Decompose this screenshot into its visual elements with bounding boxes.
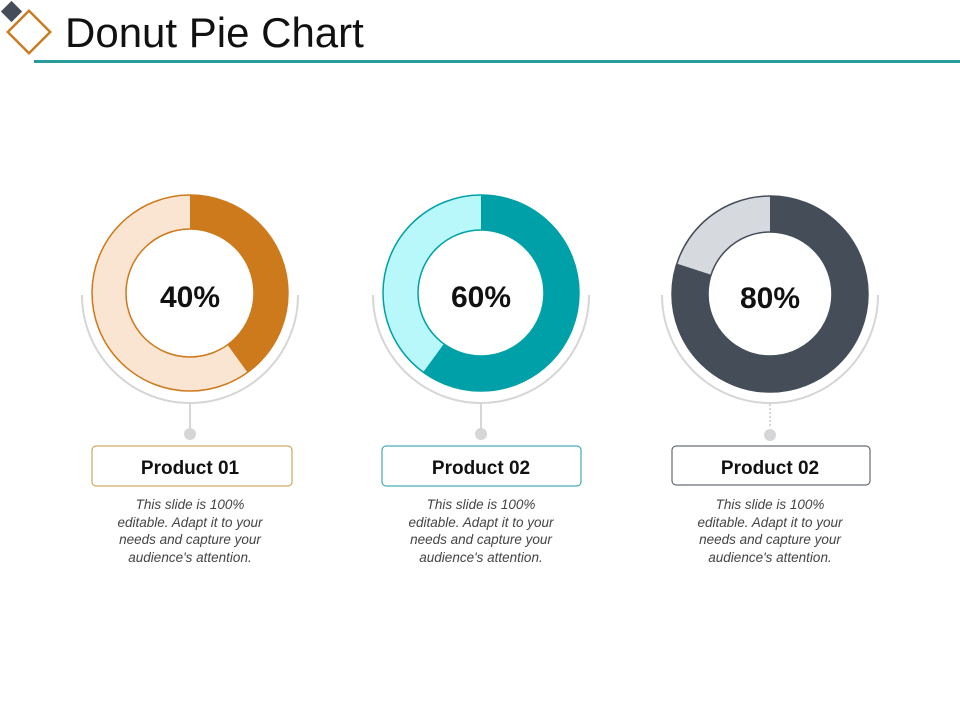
title underline [34,60,960,63]
description: audience's attention. [128,550,252,565]
header icon: diamonds [1,1,50,53]
description: audience's attention. [419,550,543,565]
connector [764,404,776,441]
description: This slide is 100% [716,497,824,512]
panel: product 02 (third) [662,196,878,565]
value label: 40% [160,281,220,314]
description: This slide is 100% [136,497,244,512]
description: audience's attention. [708,550,832,565]
description: editable. Adapt it to your [697,515,843,530]
value label: 80% [740,282,800,315]
product box [382,446,581,486]
panel: product 02 [373,195,589,565]
description: needs and capture your [699,532,841,547]
half ring [662,295,878,403]
half ring [373,295,589,403]
donut 60% [383,195,579,391]
description: editable. Adapt it to your [117,515,263,530]
description: needs and capture your [119,532,261,547]
value label: 60% [451,281,511,314]
donut 80% [672,196,868,392]
title: Donut Pie Chart [65,9,364,56]
connector [475,404,487,440]
description: editable. Adapt it to your [408,515,554,530]
half ring [82,295,298,403]
product box: Product 02 [721,458,819,479]
product box: Product 02 [432,458,530,479]
donut 40% [92,195,288,391]
description: This slide is 100% [427,497,535,512]
description: needs and capture your [410,532,552,547]
connector [184,404,196,440]
product box [92,446,292,486]
product box [672,446,870,485]
product box: Product 01 [141,458,240,479]
panel: product 01 [82,195,298,565]
